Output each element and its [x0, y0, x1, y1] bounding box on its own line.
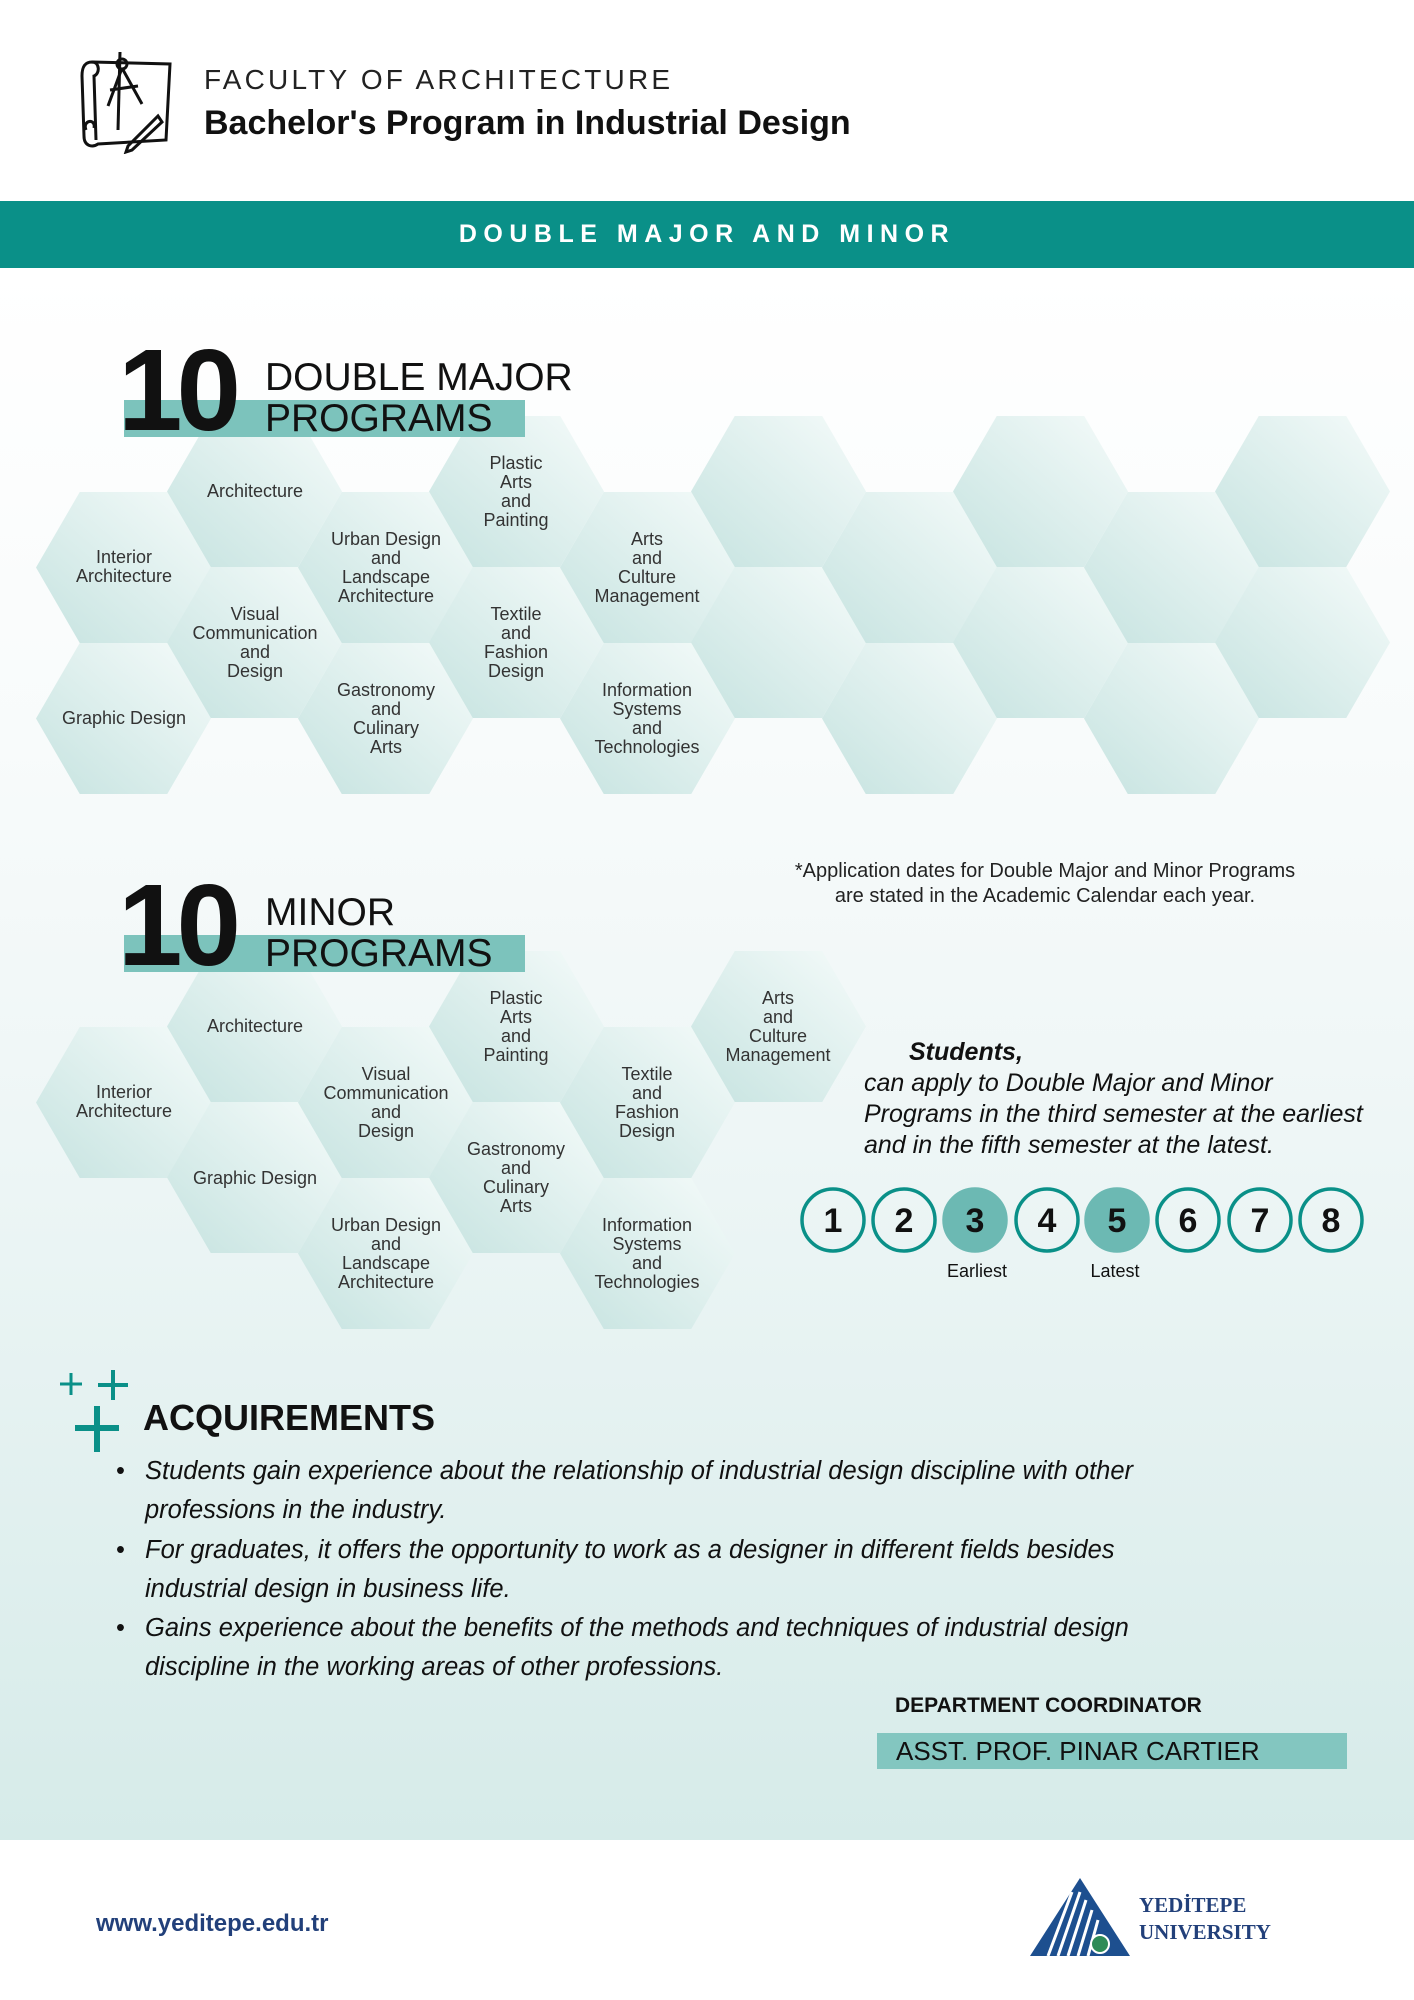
hexagon grid: double major: Graphic Design: [193, 1168, 317, 1188]
label: plastic arts: and: [501, 491, 531, 511]
label: textile: Design: [488, 661, 544, 681]
hexagon grid: double major: Architecture: [207, 1016, 303, 1036]
hexagon grid: double major: and: [371, 1234, 401, 1254]
list: acquirements: •: [116, 1536, 125, 1564]
label: visual communication: Design: [227, 661, 283, 681]
hexagon grid: double major: and: [371, 1102, 401, 1122]
semester timeline circles: 7: [1251, 1202, 1269, 1240]
semester timeline circles: 5: [1108, 1202, 1126, 1240]
note: application dates: are stated in the Academic Calendar each year.: [835, 885, 1255, 907]
heading: 10 double major programs: [118, 325, 573, 455]
label: interior architecture: Architecture: [76, 566, 172, 586]
list: acquirements: For graduates, it offers the opportunity to work as a designer in different fields besides: [145, 1536, 1115, 1564]
label: information systems: Systems: [612, 699, 682, 719]
semester timeline circles: Earliest: [947, 1261, 1007, 1281]
heading: 10 minor programs: MINOR: [265, 891, 395, 934]
list: acquirements: professions in the industry.: [145, 1496, 446, 1524]
coordinator label: DEPARTMENT COORDINATOR: [895, 1694, 1202, 1717]
label: plastic arts: Arts: [500, 472, 532, 492]
banner: double major and minor: DOUBLE MAJOR AND MINOR: [459, 220, 955, 248]
note: application dates: *Application dates for Double Major and Minor Programs: [795, 860, 1295, 882]
label: gastronomy: Arts: [370, 737, 402, 757]
heading: 10 minor programs: [118, 860, 525, 990]
label: gastronomy: Gastronomy: [337, 680, 435, 700]
hexagon grid: double major: and: [501, 1158, 531, 1178]
heading: 10 minor programs: 10: [118, 860, 235, 990]
label: architecture: Architecture: [207, 481, 303, 501]
label: plastic arts: Plastic: [489, 453, 543, 473]
minor labels: Interior: [96, 1082, 152, 1102]
text block: students can apply: Students,: [909, 1038, 1023, 1066]
hexagon grid: double major: Arts: [500, 1196, 532, 1216]
hexagon grid: double major: and: [632, 1253, 662, 1273]
semester timeline circles: 6: [1179, 1202, 1197, 1240]
hexagon grid: double major: Design: [358, 1121, 414, 1141]
text block: students can apply: [864, 1038, 1364, 1159]
footer: website: www.yeditepe.edu.tr: [96, 1910, 328, 1937]
semester timeline circles: 1: [824, 1202, 842, 1240]
semester timeline circles: 2: [895, 1202, 913, 1240]
semester timeline circles: 4: [1038, 1202, 1057, 1240]
hexagon grid: double major: and: [763, 1007, 793, 1027]
list: acquirements: [116, 1457, 1134, 1681]
note: application dates: [795, 860, 1295, 907]
footer: university logo: YEDİTEPE: [1139, 1893, 1246, 1917]
label: urban design: and: [371, 548, 401, 568]
footer: university logo: [1030, 1878, 1271, 1956]
hexagon grid: double major: Management: [725, 1045, 831, 1065]
semester timeline circles: [800, 1187, 1364, 1281]
semester timeline circles: Latest: [1090, 1261, 1140, 1281]
heading: 10 double major programs: PROGRAMS: [265, 397, 493, 440]
label: textile: Textile: [490, 604, 542, 624]
label: arts culture: Culture: [618, 567, 676, 587]
hexagon grid: double major: and: [501, 1026, 531, 1046]
label: information systems: Technologies: [594, 737, 700, 757]
hexagon grid: double major: Culture: [749, 1026, 807, 1046]
heading: acquirements: ACQUIREMENTS: [143, 1397, 435, 1438]
label: graphic design: Graphic Design: [62, 708, 186, 728]
hexagon grid: double major: Technologies: [594, 1272, 700, 1292]
minor hexes: [36, 1027, 211, 1178]
label: urban design: Architecture: [338, 586, 434, 606]
coordinator name box: [877, 1733, 1347, 1769]
minor labels: Architecture: [76, 1101, 172, 1121]
footer: university logo: UNIVERSITY: [1139, 1920, 1271, 1944]
list: acquirements: •: [116, 1457, 125, 1485]
semester timeline circles: 8: [1322, 1202, 1340, 1240]
label: interior architecture: Interior: [96, 547, 152, 567]
label: visual communication: and: [240, 642, 270, 662]
semester timeline circles: 3: [966, 1202, 984, 1240]
label: gastronomy: Culinary: [353, 718, 419, 738]
hexagon grid: double major: Arts: [762, 988, 794, 1008]
label: visual communication: Visual: [231, 604, 279, 624]
hexagon grid: double major: Landscape: [342, 1253, 430, 1273]
hexagon grid: double major: Plastic: [489, 988, 543, 1008]
hexagon grid: double major: Textile: [621, 1064, 673, 1084]
list: acquirements: discipline in the working areas of other professions.: [145, 1653, 723, 1681]
hexagon grid: double major: Communication: [323, 1083, 449, 1103]
label: plastic arts: Painting: [483, 510, 549, 530]
label: information systems: and: [632, 718, 662, 738]
heading: 10 double major programs: 10: [118, 325, 235, 455]
label: information systems: Information: [602, 680, 692, 700]
text block: students can apply: Programs in the third semester at the earliest: [864, 1100, 1363, 1128]
label: arts culture: Arts: [631, 529, 663, 549]
banner: double major and minor: [0, 201, 1414, 268]
list: acquirements: Gains experience about the benefits of the methods and techniques of industrial design: [145, 1614, 1129, 1642]
label: urban design: Urban Design: [331, 529, 441, 549]
hexagon grid: double major: Design: [619, 1121, 675, 1141]
label: textile: Fashion: [484, 642, 548, 662]
hexagon grid: double major: Painting: [483, 1045, 549, 1065]
text block: students can apply: and in the fifth semester at the latest.: [864, 1131, 1274, 1159]
label: urban design: Landscape: [342, 567, 430, 587]
icon: plus signs: [60, 1370, 128, 1452]
text block: students can apply: can apply to Double Major and Minor: [864, 1069, 1273, 1097]
header: program title: Bachelor's Program in Industrial Design: [204, 104, 851, 142]
label: textile: and: [501, 623, 531, 643]
hexagon grid: double major: Culinary: [483, 1177, 549, 1197]
hexagon grid: double major: Arts: [500, 1007, 532, 1027]
hexagon grid: double major: Gastronomy: [467, 1139, 565, 1159]
list: acquirements: industrial design in business life.: [145, 1575, 511, 1603]
heading: 10 double major programs: DOUBLE MAJOR: [265, 356, 573, 399]
label: arts culture: and: [632, 548, 662, 568]
label: arts culture: Management: [594, 586, 700, 606]
header icon: blueprint scroll with compass and pencil: [80, 52, 172, 154]
label: visual communication: Communication: [192, 623, 318, 643]
hexagon grid: double major: Systems: [612, 1234, 682, 1254]
header: faculty name: FACULTY OF ARCHITECTURE: [204, 64, 673, 95]
list: acquirements: Students gain experience about the relationship of industrial design discipline with other: [145, 1457, 1133, 1485]
hexagon grid: double major: Urban Design: [331, 1215, 441, 1235]
hexagon grid: double major: Architecture: [338, 1272, 434, 1292]
hexagon grid: double major: Visual: [362, 1064, 410, 1084]
hexagon grid: double major: Information: [602, 1215, 692, 1235]
hexagon grid: double major: Fashion: [615, 1102, 679, 1122]
hexagon grid: double major: and: [632, 1083, 662, 1103]
hexagon grid: double major: [36, 416, 1390, 1329]
heading: 10 minor programs: PROGRAMS: [265, 932, 493, 975]
list: acquirements: •: [116, 1614, 125, 1642]
label: gastronomy: and: [371, 699, 401, 719]
coordinator name box: ASST. PROF. PINAR CARTIER: [896, 1736, 1260, 1766]
